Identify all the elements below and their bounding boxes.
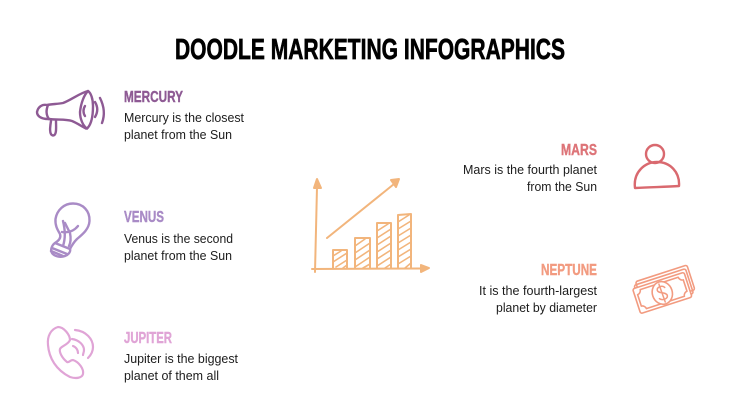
text: Mars description: Mars is the fourth planet [463,163,597,177]
bars [333,214,411,268]
text: Venus description: planet from the Sun [124,249,232,263]
icon: light bulb [51,204,90,257]
heading: Mars: MARS [561,142,597,159]
text: Jupiter description [124,352,238,383]
heading: Jupiter: JUPITER [124,330,172,347]
chart axes [312,179,429,272]
text: Jupiter description: Jupiter is the biggest [124,352,238,366]
text: Neptune description [479,284,597,315]
text: Neptune description: It is the fourth-largest [479,284,597,298]
icon: person [635,145,679,188]
text: Venus description [124,232,233,263]
text: Mars description [463,163,597,194]
title: DOODLE MARKETING INFOGRAPHICS [175,34,565,66]
heading: Venus: VENUS [124,209,164,226]
text: Venus description: Venus is the second [124,232,233,246]
panel: Neptune [479,262,697,315]
chart: rising bar chart doodle [312,179,429,272]
text: Mercury description: planet from the Sun [124,128,232,142]
icon: megaphone [37,91,104,136]
panel: Mercury [37,89,244,142]
heading: Neptune: NEPTUNE [541,262,597,279]
heading: Mercury: MERCURY [124,89,183,106]
icon: banknotes [631,265,697,314]
trend arrow [327,179,399,238]
text: Mars description: from the Sun [527,180,597,194]
panel: Jupiter [48,327,238,383]
panel: Venus [51,204,233,263]
text: Neptune description: planet by diameter [496,301,597,315]
text: Mercury description: Mercury is the closest [124,111,244,125]
panel: Mars [463,142,679,194]
text: Mercury description [124,111,244,142]
icon: phone [48,327,93,378]
text: Jupiter description: planet of them all [124,369,219,383]
